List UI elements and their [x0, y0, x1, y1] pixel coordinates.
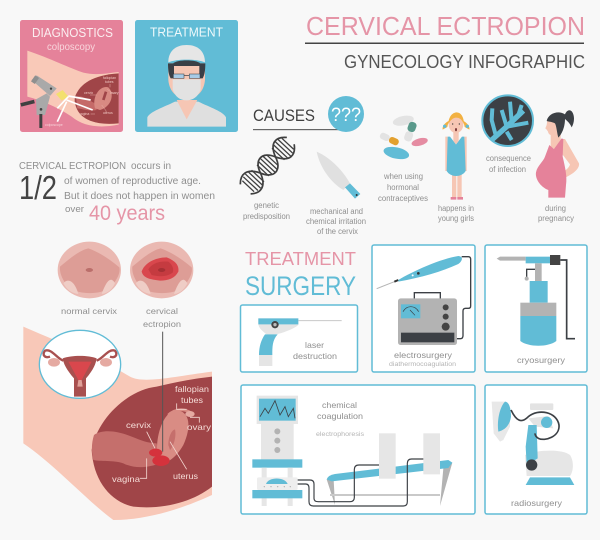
body silhouette	[23, 327, 212, 520]
panel: cryosurgery: cryosurgery	[517, 355, 566, 365]
tiny labels: colposcopy diagram	[45, 76, 119, 127]
illustration: colposcopy	[20, 51, 119, 128]
cause: mechanical and chemical irritation	[306, 152, 366, 236]
text block: occurrence statistic: occurs in	[131, 161, 171, 172]
panel: diagnostics: colposcopy	[47, 42, 95, 53]
cause: young girls: young girls	[438, 214, 474, 223]
tiny labels: colposcopy diagram: uterus	[103, 111, 113, 115]
illustration: anatomy cross-section: fallopian	[175, 384, 209, 394]
text block: occurrence statistic: of women of reproductive age.	[64, 176, 201, 187]
cause: hormonal contraceptives: contraceptives	[378, 194, 428, 203]
cause: young girls	[438, 112, 474, 223]
icon: electrosurgery unit	[377, 256, 471, 345]
heading: treatment surgery	[245, 249, 356, 301]
icon: radiosurgery machine	[492, 402, 574, 485]
cause: pregnancy: pregnancy	[538, 214, 574, 223]
cervix lesion	[149, 449, 162, 457]
cause: mechanical and chemical irritation: chemical irritation	[306, 217, 366, 226]
pelvic cavity	[92, 377, 212, 507]
panel: electrosurgery: diathermocoagulation	[389, 361, 456, 368]
panel: treatment	[135, 20, 238, 132]
panel: radiosurgery	[485, 385, 587, 514]
illustration: anatomy cross-section	[23, 327, 212, 520]
cause: pregnancy: during	[545, 204, 566, 213]
panel: electrosurgery: electrosurgery	[394, 350, 453, 360]
cause: genetic predisposition: predisposition	[243, 212, 290, 221]
vagina canal	[92, 431, 160, 467]
cause: infection: of infection	[489, 165, 526, 174]
uterus	[157, 410, 188, 463]
text block: occurrence statistic: 40 years	[89, 202, 165, 225]
title	[305, 11, 585, 72]
illustration: cervical ectropion	[130, 242, 193, 329]
cause: genetic predisposition	[237, 133, 299, 221]
illustration: anatomy cross-section: uterus	[173, 471, 198, 481]
cause: mechanical and chemical irritation: mechanical and	[310, 207, 363, 216]
panel: chemical coagulation: coagulation	[317, 411, 363, 421]
illustration: anatomy cross-section: ovary	[187, 422, 212, 432]
heading: causes: CAUSES	[253, 106, 315, 125]
illustration: cervical ectropion: ectropion	[143, 319, 181, 329]
panel: electrosurgery	[372, 245, 475, 372]
title: GYNECOLOGY INFOGRAPHIC	[344, 52, 585, 72]
illustration: normal cervix: normal cervix	[61, 306, 118, 316]
panel: chemical coagulation: chemical	[322, 400, 357, 410]
leader lines	[140, 403, 199, 478]
illustration: cervical ectropion: cervical	[146, 306, 178, 316]
icon: question marks: ???	[331, 105, 361, 126]
cause: hormonal contraceptives	[378, 114, 429, 203]
icon: laser	[258, 318, 342, 366]
cause: pregnancy	[536, 110, 579, 223]
panel: diagnostics: DIAGNOSTICS	[32, 26, 113, 40]
cause: infection	[482, 95, 533, 174]
icon: doctor	[147, 45, 226, 127]
tiny labels: colposcopy diagram: fallopian	[103, 76, 116, 80]
icon: electrophoresis equipment	[252, 396, 452, 506]
panel: cryosurgery	[485, 245, 587, 372]
cause: mechanical and chemical irritation: of the cervix	[317, 227, 358, 236]
text block: occurrence statistic: But it does not happen in women	[64, 191, 215, 202]
cause: genetic predisposition: genetic	[254, 201, 279, 210]
text block: occurrence statistic: CERVICAL ECTROPION	[19, 161, 126, 172]
tiny labels: colposcopy diagram: vagina	[79, 112, 89, 116]
panel: chemical coagulation: electrophoresis	[316, 431, 365, 438]
panel: laser destruction	[240, 305, 358, 372]
panel: chemical coagulation	[241, 385, 475, 514]
illustration: anatomy cross-section: vagina	[112, 474, 140, 484]
illustration: anatomy cross-section: tubes	[181, 395, 203, 405]
icon: cryo device	[497, 255, 575, 346]
tiny labels: colposcopy diagram: tubes	[105, 80, 114, 84]
illustration: normal cervix	[58, 242, 121, 316]
panel: laser destruction: destruction	[293, 351, 337, 361]
cause: young girls: happens in	[438, 204, 474, 213]
panel: radiosurgery: radiosurgery	[511, 498, 563, 508]
panel: laser destruction: laser	[305, 340, 324, 350]
text block: occurrence statistic: 1/2	[19, 169, 57, 206]
cause: infection: consequence	[486, 154, 532, 163]
text block: occurrence statistic	[19, 161, 215, 225]
text block: occurrence statistic: over	[65, 204, 84, 215]
icon: uterus inset	[39, 330, 121, 398]
tiny labels: colposcopy diagram: ovary	[110, 91, 119, 95]
panel: diagnostics	[20, 20, 123, 132]
tiny labels: colposcopy diagram: cervix	[84, 91, 93, 95]
illustration: anatomy cross-section: cervix	[126, 420, 152, 430]
cause: hormonal contraceptives: hormonal	[387, 183, 419, 192]
heading: causes	[253, 96, 364, 132]
tiny labels: colposcopy diagram: colposcope	[45, 123, 63, 127]
title: CERVICAL ECTROPION	[306, 11, 585, 41]
heading: treatment surgery: TREATMENT	[245, 249, 356, 269]
heading: treatment surgery: SURGERY	[245, 271, 356, 301]
panel: treatment: TREATMENT	[150, 26, 223, 40]
cause: hormonal contraceptives: when using	[383, 172, 423, 181]
